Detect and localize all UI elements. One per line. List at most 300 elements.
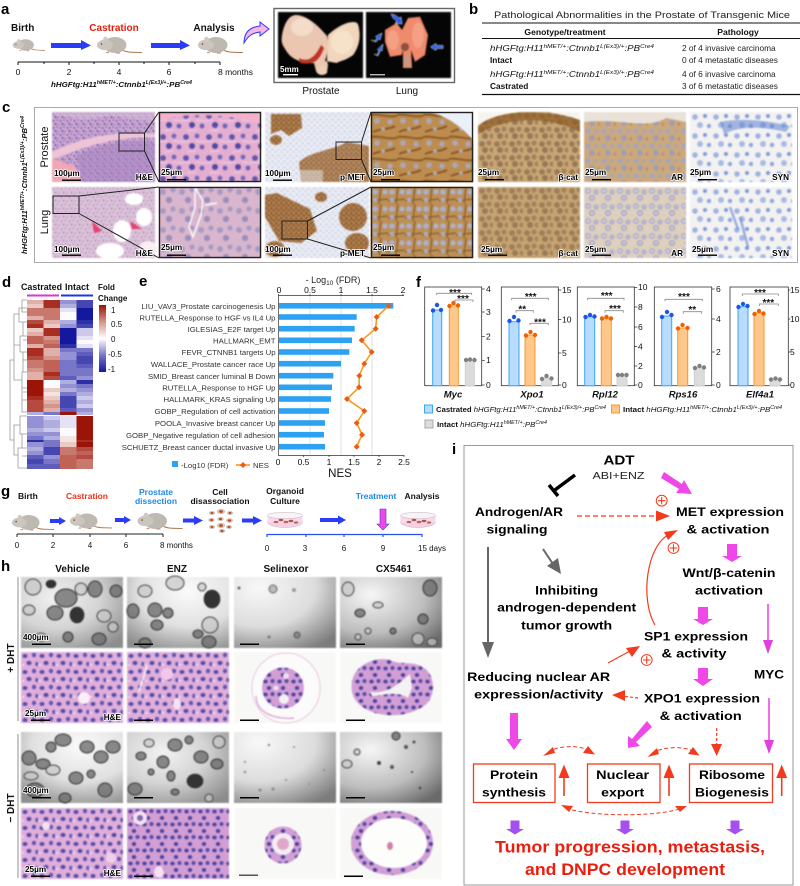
top axis title: (FDR) bbox=[333, 275, 360, 285]
chart: Xpo1: 5 bbox=[562, 348, 567, 358]
bottom axis labels: 2.5 bbox=[398, 457, 410, 467]
genotype caption: L(Ex3)/+ bbox=[146, 80, 167, 86]
photo captions: Lung bbox=[396, 86, 418, 97]
panel d: heatmap bbox=[2, 274, 128, 469]
chart: Elf4a1: *** bbox=[762, 298, 774, 309]
box: nuclear export: export bbox=[601, 786, 644, 800]
row intact: L(Ex3)/+ bbox=[600, 44, 625, 50]
chart: Rpl12: 10 bbox=[638, 282, 648, 292]
fold change legend: 0.5 bbox=[111, 320, 123, 329]
scale bars and H&E labels: H&E bbox=[104, 713, 122, 722]
x axis title NES: NES bbox=[328, 468, 352, 480]
genotype caption: Cre4 bbox=[180, 80, 192, 86]
chart: Elf4a1: 0 bbox=[790, 380, 795, 390]
scale bars and stain labels: 100µm bbox=[54, 169, 80, 178]
photo: prostate bbox=[276, 10, 364, 80]
panel b: pathology table bbox=[469, 1, 800, 94]
image: prostate p-MET inset bbox=[370, 111, 474, 183]
genotype side label: hHGFtg:H11 bbox=[22, 214, 29, 254]
chart: Myc: 1 bbox=[486, 355, 491, 365]
category labels: SCHUETZ_Breast cancer ductal invasive Up bbox=[122, 443, 276, 452]
day axis: 6 bbox=[342, 544, 347, 553]
dendrogram bbox=[10, 300, 27, 468]
table title: Pathological Abnormalities in the Prostate of Transgenic Mice bbox=[494, 10, 790, 21]
scale bars and stain labels: AR bbox=[671, 173, 683, 182]
image: prostate beta-catenin bbox=[477, 111, 581, 183]
chart: Elf4a1: Elf4a1 bbox=[746, 390, 774, 400]
chart: Myc: 3 bbox=[486, 307, 491, 317]
image: Selinexor minus DHT H&E bbox=[235, 809, 335, 878]
row castrated: Castrated bbox=[490, 81, 528, 91]
time axis in months: 2 bbox=[67, 67, 72, 77]
workflow step labels: Prostate bbox=[139, 487, 173, 497]
scale bars and H&E labels bbox=[23, 633, 365, 878]
workflow step labels: Culture bbox=[270, 496, 300, 506]
column headers bbox=[55, 564, 413, 575]
column headers: Vehicle bbox=[55, 564, 90, 575]
category labels: GOBP_Regulation of cell activation bbox=[154, 407, 276, 416]
chart: Rpl12 bbox=[577, 282, 648, 400]
box: protein synthesis: Protein bbox=[490, 768, 538, 782]
row labels and brackets: − DHT bbox=[6, 793, 17, 823]
scale bars on photos: 5mm bbox=[280, 65, 299, 74]
node: androgen AR signaling: signaling bbox=[486, 522, 548, 536]
chart legend: hMET/+ bbox=[690, 405, 709, 411]
chart: Xpo1: 10 bbox=[562, 314, 572, 324]
month axis bbox=[15, 534, 193, 550]
scale bars and stain labels: p-MET bbox=[340, 249, 365, 258]
scale bars and stain labels: 100µm bbox=[265, 169, 291, 178]
chart: Elf4a1: 5 bbox=[790, 347, 795, 357]
image: vehicle plus DHT brightfield bbox=[20, 576, 124, 649]
row castrated: L(Ex3)/+ bbox=[600, 70, 625, 76]
category labels: RUTELLA_Response to HGF vs IL4 Up bbox=[139, 314, 276, 322]
chart: Rpl12: Rpl12 bbox=[592, 390, 619, 400]
month axis: 2 bbox=[51, 541, 56, 550]
diagram frame bbox=[464, 446, 793, 885]
category labels: HALLMARK_KRAS signaling Up bbox=[164, 395, 276, 404]
group labels bbox=[21, 281, 89, 292]
panel letter c: c bbox=[2, 99, 10, 116]
chart: Xpo1: 15 bbox=[562, 285, 572, 295]
table header: Pathology bbox=[717, 27, 759, 37]
group labels: Castrated bbox=[21, 281, 62, 292]
workflow step labels: disassociation bbox=[190, 496, 250, 506]
panel letter f: f bbox=[416, 274, 422, 291]
workflow step labels: Analysis bbox=[405, 491, 440, 501]
time axis in months: 4 bbox=[117, 67, 122, 77]
icons: mice bbox=[13, 37, 243, 53]
bottom axis labels: 2 bbox=[377, 457, 382, 467]
chart legend: :Ctnnb1 bbox=[709, 405, 737, 414]
image: CX5461 minus DHT H&E bbox=[341, 809, 441, 878]
box: ribosome biogenesis bbox=[690, 764, 772, 802]
row castrated: :Ctnnb1 bbox=[566, 69, 600, 79]
conclusion text: Tumor progression, metastasis, bbox=[495, 838, 765, 856]
FDR bars bbox=[279, 303, 393, 450]
genotype side label: :Ctnnb1 bbox=[22, 162, 29, 191]
scale bars and stain labels: SYN bbox=[772, 249, 789, 258]
image: CX5461 plus DHT brightfield bbox=[339, 576, 443, 649]
top axis labels: 1.5 bbox=[366, 285, 378, 295]
chart legend: hMET/+ bbox=[516, 405, 535, 411]
chart: Rps16: 4 bbox=[716, 314, 721, 324]
workflow step labels: Organoid bbox=[266, 486, 304, 496]
time axis in months: 0 bbox=[16, 67, 21, 77]
image: Selinexor plus DHT H&E bbox=[235, 652, 335, 724]
panel letter i: i bbox=[452, 441, 456, 458]
month axis: 0 bbox=[15, 541, 20, 550]
arrow: MYC to ribosome bbox=[764, 698, 774, 754]
arrow: androgen to inhibiting growth bbox=[543, 549, 561, 574]
time axis in months: 6 bbox=[167, 67, 172, 77]
image: Selinexor minus DHT brightfield bbox=[233, 731, 337, 804]
node: SP1 bbox=[644, 630, 748, 660]
scale bars and stain labels: 25µm bbox=[373, 243, 394, 252]
genotype caption: :PB bbox=[167, 80, 181, 89]
scale bars and stain labels: 25µm bbox=[585, 245, 606, 254]
fold change legend: -0.5 bbox=[108, 350, 122, 359]
bottom axis labels bbox=[276, 457, 410, 467]
arrow: reducing AR to SP1 bbox=[608, 646, 640, 663]
box: ribosome biogenesis: Biogenesis bbox=[695, 786, 769, 800]
inhibition mark bbox=[549, 475, 575, 496]
photo frame with prostate and lung bbox=[274, 8, 454, 82]
image: lung H&E inset bbox=[158, 186, 262, 259]
scale bars and H&E labels: 25µm bbox=[25, 709, 46, 718]
node: Wnt beta-catenin bbox=[682, 566, 776, 598]
scale bars and stain labels: β-cat bbox=[558, 173, 578, 182]
chart: Elf4a1: 10 bbox=[790, 314, 800, 324]
table rules bbox=[482, 23, 800, 38]
table header: Genotype/treatment bbox=[524, 27, 606, 37]
photo captions bbox=[302, 86, 418, 97]
arrows: purple down arrows bbox=[506, 820, 744, 834]
icons: mice bbox=[12, 513, 182, 530]
image: ENZ minus DHT H&E bbox=[126, 807, 230, 880]
chart legend: L(Ex3)/+ bbox=[562, 405, 582, 411]
image: prostate SYN bbox=[690, 112, 793, 183]
chart legend: Intact hHGFtg:H11 bbox=[437, 420, 502, 429]
chart: Myc bbox=[425, 284, 491, 400]
icons: culture dishes bbox=[268, 512, 436, 528]
panel letter g: g bbox=[1, 483, 10, 500]
chart legend: Cre4 bbox=[770, 405, 782, 411]
group labels: Intact bbox=[65, 281, 89, 292]
box: ribosome biogenesis: Ribosome bbox=[699, 768, 765, 782]
row intact: 2 of 4 invasive carcinoma bbox=[682, 43, 776, 53]
chart legend bbox=[424, 405, 782, 429]
column headers: ENZ bbox=[167, 564, 187, 575]
image: Selinexor plus DHT brightfield bbox=[233, 576, 337, 649]
box: protein synthesis: synthesis bbox=[482, 786, 546, 800]
plus sign near MET bbox=[656, 495, 667, 506]
chart: Xpo1 bbox=[501, 285, 572, 400]
genotype caption: :Ctnnb1 bbox=[116, 80, 146, 89]
NES line bbox=[344, 303, 392, 450]
chart: Rps16: 2 bbox=[716, 347, 721, 357]
node: XPO1 bbox=[644, 692, 760, 723]
scale bars and stain labels: 25µm bbox=[481, 245, 502, 254]
row castrated: Cre4 bbox=[640, 70, 654, 76]
day axis: 0 bbox=[265, 544, 270, 553]
node: ADT: ABI+ENZ bbox=[592, 470, 645, 482]
timeline stage labels: Castration bbox=[89, 23, 139, 34]
image: lung p-MET low power bbox=[264, 186, 370, 258]
row castrated: :PB bbox=[625, 69, 641, 79]
genotype side label: hMET/+ bbox=[20, 191, 26, 210]
chart: Rps16: *** bbox=[678, 292, 690, 303]
node: SP1: SP1 expression bbox=[644, 630, 748, 644]
scale bars and stain labels: 100µm bbox=[265, 245, 291, 254]
image: ENZ plus DHT H&E bbox=[126, 651, 230, 724]
photo captions: Prostate bbox=[302, 86, 340, 97]
conclusion text: and DNPC development bbox=[525, 861, 726, 879]
zoom boxes and connector lines bbox=[53, 112, 472, 258]
scale bars and stain labels: H&E bbox=[136, 249, 154, 258]
arrow: reducing AR to protein synthesis bbox=[506, 713, 522, 750]
row intact bbox=[490, 43, 778, 65]
node: Wnt beta-catenin: activation bbox=[695, 584, 763, 598]
node: ADT bbox=[592, 452, 645, 482]
dashed arrow: XPO1 to reducing AR bbox=[612, 690, 638, 701]
node: MET expression: & activation bbox=[686, 522, 770, 536]
category labels: LIU_VAV3_Prostate carcinogenesis Up bbox=[141, 302, 276, 311]
chart: Rpl12: 2 bbox=[638, 361, 643, 371]
chart: Rps16: 6 bbox=[716, 284, 721, 294]
category labels: RUTELLA_Response to HGF Up bbox=[162, 384, 276, 392]
chart: Xpo1: Xpo1 bbox=[519, 390, 544, 400]
chart legend: :Ctnnb1 bbox=[535, 405, 562, 414]
node: SP1: & activity bbox=[662, 646, 727, 660]
panel i: pathway diagram bbox=[452, 441, 793, 885]
chart: Xpo1: ** bbox=[518, 304, 526, 316]
day axis: 9 bbox=[381, 544, 386, 553]
panel frame bbox=[34, 108, 798, 262]
arrow: Wnt to SP1 bbox=[693, 607, 713, 625]
dashed arrow: XPO1 to ribosome bbox=[711, 728, 722, 756]
chart: Myc: 4 bbox=[486, 284, 491, 294]
chart legend: :PB bbox=[758, 405, 770, 414]
chart: Rpl12: 8 bbox=[638, 302, 643, 312]
group colour bars bbox=[27, 294, 93, 296]
panel a: experimental timeline and gross pathology bbox=[1, 1, 454, 97]
axis lines and grid bbox=[310, 296, 372, 455]
arrows: blue workflow arrows bbox=[50, 516, 346, 525]
chart: Rpl12: 4 bbox=[638, 342, 643, 352]
bottom axis labels: 1 bbox=[327, 457, 332, 467]
arrows: blue progression arrows bbox=[51, 40, 190, 50]
panel e: enrichment bar and line chart bbox=[122, 273, 410, 480]
panel c: histology and IHC grid bbox=[2, 99, 798, 262]
scale bars and stain labels: 25µm bbox=[690, 168, 711, 177]
image: vehicle minus DHT H&E bbox=[20, 807, 124, 880]
month axis: 4 bbox=[88, 541, 93, 550]
image: lung H&E low power bbox=[51, 186, 157, 259]
image: vehicle plus DHT H&E bbox=[20, 651, 124, 724]
top axis labels: 2 bbox=[401, 285, 406, 295]
category labels: HALLMARK_EMT bbox=[213, 336, 276, 346]
bottom axis labels: 0 bbox=[276, 457, 281, 467]
chart: Myc: 0 bbox=[486, 380, 491, 390]
fold change legend: -1 bbox=[108, 365, 116, 374]
category labels: IGLESIAS_E2F target Up bbox=[188, 325, 276, 334]
day axis bbox=[265, 534, 446, 553]
arrow: Wnt to MYC bbox=[763, 604, 773, 654]
genotype side label: Cre4 bbox=[20, 116, 26, 128]
arrow: ADT to MET bbox=[661, 472, 692, 494]
row labels and brackets: + DHT bbox=[6, 643, 17, 673]
chart: Rpl12: *** bbox=[609, 304, 621, 315]
chart: Myc: Myc bbox=[444, 390, 463, 400]
chart legend: Castrated hHGFtg:H11 bbox=[436, 405, 516, 414]
node: reducing nuclear AR: Reducing nuclear AR bbox=[467, 670, 611, 684]
row intact: hMET/+ bbox=[544, 44, 567, 50]
arrows: red up arrows bbox=[558, 764, 787, 796]
plus sign near feedback bbox=[668, 543, 679, 553]
box: protein synthesis bbox=[474, 764, 555, 802]
scale bars and stain labels: β-cat bbox=[558, 249, 578, 258]
timeline stage labels: Analysis bbox=[193, 23, 235, 34]
row intact: :PB bbox=[625, 43, 641, 53]
timeline stage labels bbox=[11, 23, 235, 34]
panel h: organoid images bbox=[1, 558, 442, 879]
time axis in months: 8 months bbox=[218, 67, 253, 77]
workflow step labels bbox=[18, 486, 440, 506]
chart: Rpl12: *** bbox=[601, 291, 613, 302]
dashed curved arrows between processes bbox=[543, 746, 700, 815]
chart legend: :PB bbox=[523, 420, 535, 429]
node: MET expression bbox=[676, 505, 784, 536]
box: nuclear export: Nuclear bbox=[596, 768, 650, 782]
arrow: treatment down arrow bbox=[377, 509, 389, 530]
scale bars and H&E labels: 400µm bbox=[23, 786, 49, 795]
day axis: 3 bbox=[303, 544, 308, 553]
top axis labels: 1 bbox=[339, 285, 344, 295]
fold change legend: 1 bbox=[111, 306, 116, 315]
node: androgen AR signaling: Androgen/AR bbox=[475, 505, 563, 519]
chart legend bbox=[172, 461, 269, 470]
bottom axis labels: 0.5 bbox=[298, 457, 310, 467]
fold change legend: Fold bbox=[98, 283, 115, 292]
panel f: gene expression bar charts bbox=[416, 274, 800, 429]
row castrated: 4 of 6 invasive carcinoma bbox=[682, 69, 776, 79]
box: nuclear export bbox=[588, 764, 660, 802]
panel letter a: a bbox=[1, 1, 10, 18]
workflow step labels: Treatment bbox=[356, 491, 396, 501]
conclusion text bbox=[495, 838, 765, 879]
top axis labels bbox=[277, 285, 406, 295]
fold change legend: Change bbox=[98, 294, 128, 303]
node: Wnt beta-catenin: Wnt/β-catenin bbox=[682, 566, 776, 580]
scale bars and stain labels bbox=[54, 168, 789, 258]
image: prostate H&E inset bbox=[158, 111, 262, 183]
node: reducing nuclear AR bbox=[467, 670, 611, 702]
scale bars and stain labels: AR bbox=[671, 249, 683, 258]
chart: Rpl12: 0 bbox=[638, 380, 643, 390]
image: CX5461 plus DHT H&E bbox=[341, 653, 441, 722]
row castrated: hHGFtg:H11 bbox=[490, 69, 536, 79]
workflow step labels: Cell bbox=[212, 487, 228, 497]
row labels and brackets bbox=[6, 577, 18, 878]
top axis labels: 0 bbox=[277, 285, 282, 295]
image: ENZ minus DHT brightfield bbox=[126, 731, 230, 804]
chart: Rps16: ** bbox=[688, 305, 696, 316]
chart legend: L(Ex3)/+ bbox=[737, 405, 758, 411]
scale bars and stain labels: 25µm bbox=[161, 168, 182, 177]
chart legend: Intact hHGFtg:H11 bbox=[623, 405, 688, 414]
day axis: 15 days bbox=[418, 544, 446, 553]
image: prostate H&E low power bbox=[51, 111, 156, 183]
node: inhibiting growth: tumor growth bbox=[521, 618, 612, 632]
chart: Xpo1: *** bbox=[534, 318, 546, 328]
node: inhibiting growth: androgen-dependent bbox=[497, 600, 636, 614]
image: ENZ plus DHT brightfield bbox=[126, 574, 230, 650]
row labels: Prostate bbox=[39, 127, 51, 167]
image: CX5461 minus DHT brightfield bbox=[339, 730, 443, 804]
column headers: Selinexor bbox=[263, 564, 309, 575]
genotype side label: L(Ex3)/+ bbox=[20, 141, 26, 162]
column headers: CX5461 bbox=[376, 564, 413, 575]
genotype caption: hMET/+ bbox=[97, 80, 116, 86]
chart legend: :PB bbox=[582, 405, 595, 414]
scale bars and H&E labels: 400µm bbox=[23, 633, 49, 642]
workflow step labels: Castration bbox=[66, 491, 108, 501]
panel g: organoid workflow bbox=[1, 483, 446, 553]
category labels: WALLACE_Prostate cancer race Up bbox=[151, 360, 276, 369]
node: inhibiting growth: Inhibiting bbox=[535, 584, 598, 598]
scale bars and stain labels: p-MET bbox=[340, 173, 365, 182]
image: vehicle minus DHT brightfield bbox=[20, 732, 124, 804]
category labels: SMID_Breast cancer luminal B Down bbox=[148, 372, 276, 381]
panel letter b: b bbox=[469, 1, 478, 18]
top axis title: 10 bbox=[326, 280, 334, 287]
scale bars on photos bbox=[280, 65, 385, 75]
scale bars and stain labels: SYN bbox=[772, 173, 789, 182]
node: MYC: MYC bbox=[754, 668, 784, 682]
node: XPO1: XPO1 expression bbox=[644, 692, 760, 706]
row castrated: hMET/+ bbox=[544, 70, 567, 76]
panel letter e: e bbox=[139, 273, 147, 290]
scale bars and stain labels: 25µm bbox=[161, 243, 182, 252]
chart legend: Cre4 bbox=[535, 420, 547, 426]
category labels: FEVR_CTNNB1 targets Up bbox=[182, 348, 276, 357]
top axis labels: 0.5 bbox=[304, 285, 316, 295]
image: lung p-MET inset bbox=[370, 186, 474, 259]
icon: pink curved arrow bbox=[244, 22, 269, 43]
image: lung SYN bbox=[690, 187, 793, 259]
chart: Myc: *** bbox=[457, 294, 469, 305]
chart: Xpo1: *** bbox=[525, 292, 537, 303]
photo: lung bbox=[364, 10, 452, 80]
panel letter d: d bbox=[2, 274, 11, 291]
chart: Rps16: Rps16 bbox=[669, 390, 698, 400]
row castrated bbox=[490, 69, 778, 91]
row intact: hHGFtg:H11 bbox=[490, 43, 536, 53]
scale bars and H&E labels: 25µm bbox=[25, 865, 46, 874]
row intact: Intact bbox=[490, 55, 512, 65]
chart: Myc: *** bbox=[449, 288, 461, 299]
chart: Elf4a1: *** bbox=[754, 288, 766, 299]
time axis in months bbox=[16, 62, 253, 77]
arrow: SP1 feedback to MET bbox=[647, 530, 678, 625]
scale bars and H&E labels: H&E bbox=[104, 869, 122, 878]
scale bars and stain labels: H&E bbox=[136, 173, 154, 182]
row labels bbox=[39, 127, 51, 234]
genotype side label: :PB bbox=[22, 128, 29, 141]
arrow: XPO1 to nuclear export bbox=[628, 721, 652, 748]
node: MET expression: MET expression bbox=[676, 505, 784, 519]
